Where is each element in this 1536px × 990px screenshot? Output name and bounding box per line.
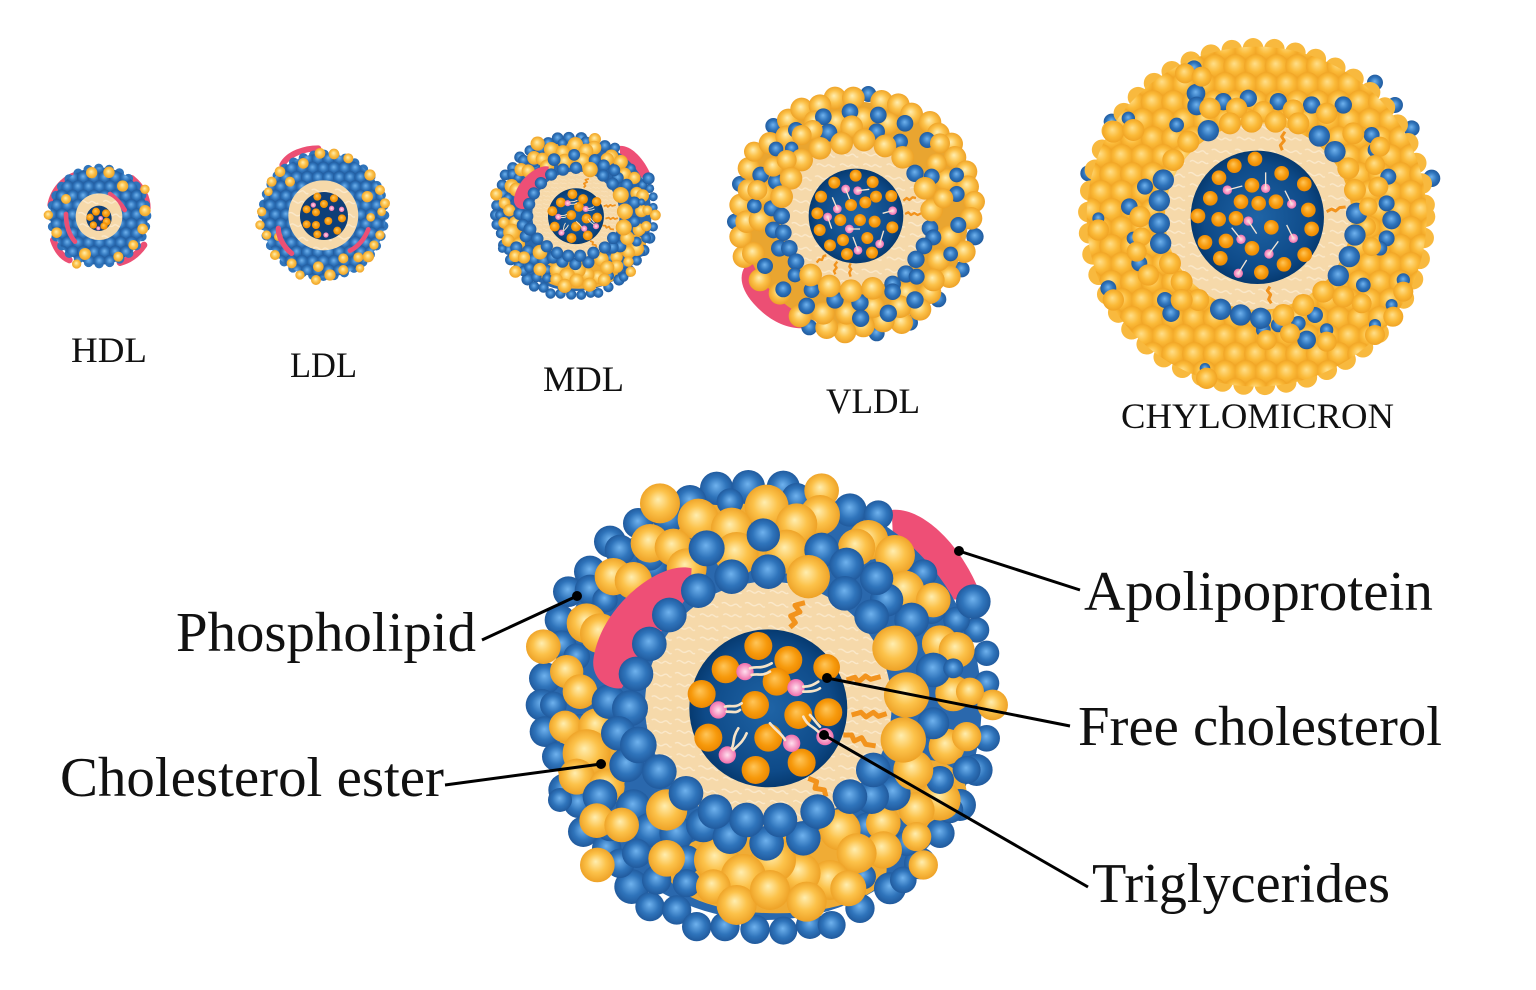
VLDL front spheres: [757, 129, 953, 327]
LDL core contents: [303, 193, 346, 238]
HDL shell: [50, 167, 148, 265]
leader: triglycerides: [819, 730, 1088, 887]
particle: LDL: [255, 148, 390, 285]
leader: cholesterol ester: [445, 759, 606, 785]
leader: apolipoprotein: [954, 546, 1080, 590]
chylomicron lipid layer: [1165, 123, 1352, 310]
outer blue spheres: [526, 470, 1000, 945]
cholesterol ester spheres: [688, 632, 842, 784]
VLDL edge blue spheres: [727, 86, 984, 341]
chylomicron covering orange spheres: [1088, 63, 1413, 389]
particle: VLDL: [727, 86, 985, 343]
label: LDL: LDL: [290, 345, 357, 385]
HDL apolipoprotein bands: [51, 174, 147, 263]
label: MDL: MDL: [543, 359, 624, 399]
VLDL outer spheres: [729, 87, 985, 343]
label: CHYLOMICRON: CHYLOMICRON: [1121, 396, 1394, 436]
VLDL rim spheres back: [747, 115, 950, 200]
label: VLDL: VLDL: [826, 381, 920, 421]
apolipoprotein right: [892, 510, 977, 600]
inner ring blue spheres over apolipoprotein: [619, 573, 716, 691]
label: Triglycerides: Triglycerides: [1092, 853, 1390, 915]
label: Phospholipid: Phospholipid: [176, 602, 476, 664]
VLDL blue spheres: [747, 103, 966, 261]
chylomicron edge blue spheres: [1080, 75, 1440, 187]
lipid layer: [645, 582, 892, 828]
LDL phospholipid spots: [255, 148, 390, 285]
label: Apolipoprotein: Apolipoprotein: [1084, 561, 1433, 623]
chylomicron core contents: [1191, 152, 1319, 280]
label: HDL: HDL: [71, 330, 147, 370]
HDL core contents: [86, 208, 111, 230]
leader: free cholesterol: [822, 673, 1070, 726]
large front orange spheres: [787, 555, 933, 790]
apolipoprotein left: [593, 567, 692, 688]
chylomicron front spheres: [1149, 111, 1388, 329]
chylomicron blue spheres: [1092, 60, 1410, 374]
particle: chylomicron: [1080, 47, 1440, 389]
VLDL squiggles: [817, 197, 921, 277]
blue spheres upper cover: [583, 518, 981, 910]
LDL apolipoprotein bands: [282, 148, 318, 165]
LDL inner apolipoproteins: [278, 228, 368, 253]
VLDL core: [809, 169, 903, 263]
LDL core: [300, 192, 348, 240]
orange squiggles: [790, 603, 887, 797]
chylomicron squiggles: [1267, 132, 1346, 303]
core: [689, 629, 847, 787]
main labelled particle: [526, 470, 1008, 945]
VLDL apolipoprotein: [742, 260, 810, 328]
orange base patches: [557, 503, 967, 913]
chylomicron shell: [1087, 47, 1427, 387]
LDL lipid layer: [288, 180, 358, 250]
bottom orange cluster: [579, 789, 931, 925]
label: Free cholesterol: Free cholesterol: [1078, 696, 1442, 758]
label: Cholesterol ester: Cholesterol ester: [60, 747, 444, 809]
chylomicron scalloped edge: [1088, 48, 1425, 385]
particle: HDL: [44, 167, 151, 269]
leader: phospholipid: [482, 591, 582, 640]
HDL inner apolipoproteins: [66, 194, 125, 242]
chylomicron core: [1191, 151, 1324, 284]
inner ring blue spheres back row: [609, 748, 911, 861]
inner ring blue spheres: [592, 548, 991, 837]
outer orange spheres: [526, 473, 1008, 882]
HDL core: [86, 206, 112, 231]
HDL lipid layer: [76, 193, 122, 240]
HDL phospholipid spots: [44, 167, 151, 269]
particle: MDL: [490, 132, 661, 300]
VLDL base: [742, 102, 968, 328]
VLDL core contents: [811, 170, 898, 260]
free cholesterol molecules: [710, 663, 834, 764]
LDL shell: [262, 153, 386, 277]
VLDL lipid layer: [782, 143, 928, 290]
blue base disc: [552, 490, 982, 920]
